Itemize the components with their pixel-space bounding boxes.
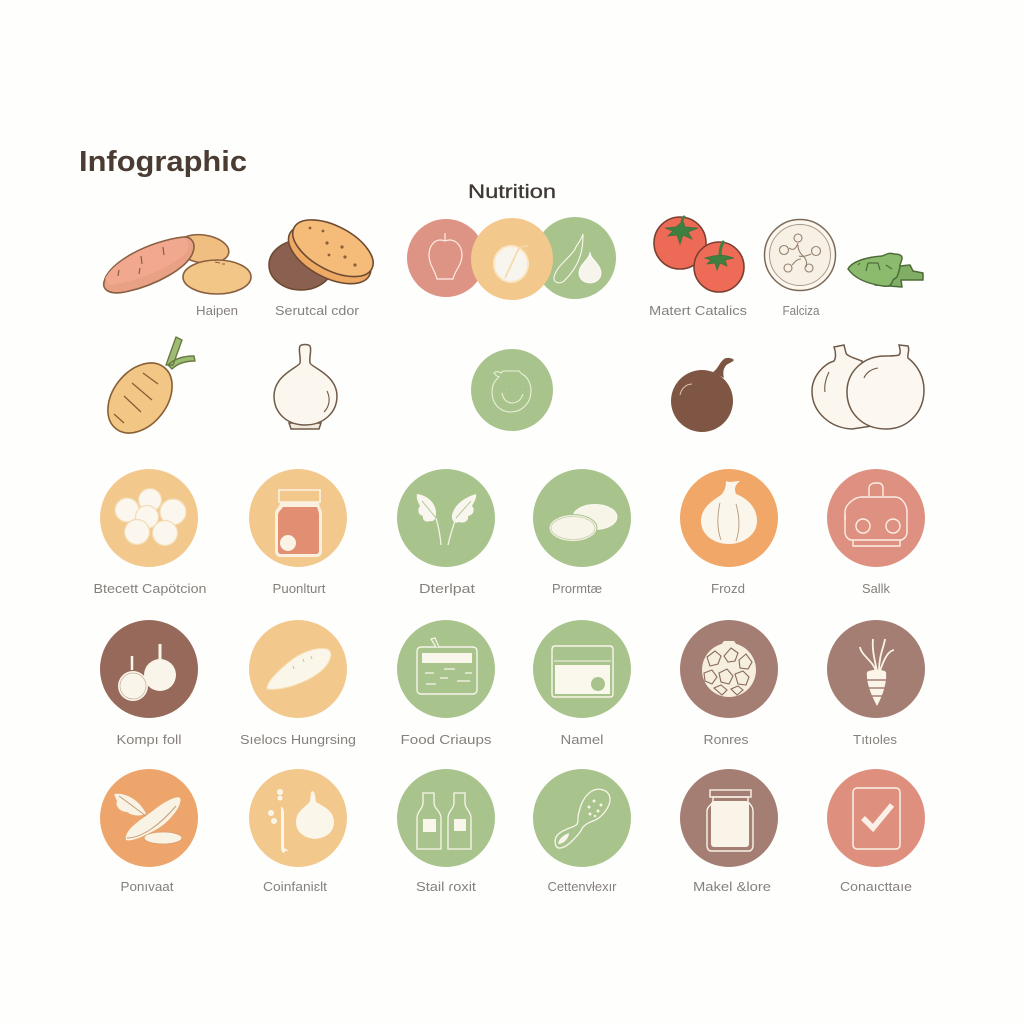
label: Ponıvaat <box>120 879 174 894</box>
label: Sıelocs Hungrsing <box>240 732 356 747</box>
circle: yellow fruit <box>471 218 553 300</box>
label: Sallk <box>862 581 890 596</box>
icon: flat breads <box>533 469 631 567</box>
icon: bottles <box>397 769 495 867</box>
icon: carrot <box>95 337 195 445</box>
icon: almonds and leaf <box>100 769 198 867</box>
label: Dterlpat <box>419 581 475 596</box>
label: Matert Catalics <box>649 303 748 318</box>
label: Ronres <box>704 732 749 747</box>
label: Haipen <box>196 303 238 318</box>
title: Infographic <box>79 146 247 178</box>
icon: leaves <box>397 469 495 567</box>
label: Makel &lore <box>693 879 771 894</box>
label: Coinfaniɛlt <box>263 879 327 894</box>
icon: white onions <box>812 345 924 429</box>
label: Food Criaups <box>400 732 492 747</box>
icon: plate with grains <box>764 220 836 290</box>
icon group: overlapping nutrition circles <box>407 217 616 300</box>
icon: food box <box>397 620 495 718</box>
label: Conaıcttaıe <box>840 879 912 894</box>
circle: rose apple <box>407 219 485 297</box>
icon: green vegetable <box>848 253 923 287</box>
icon: white garlic <box>274 344 337 429</box>
label: Falciza <box>782 303 820 318</box>
icon: tomatoes <box>654 216 744 292</box>
icon: spoon with grains <box>533 769 631 867</box>
icon: storage container <box>533 620 631 718</box>
icon: biscuit and brown bun <box>269 208 383 296</box>
icon: storage jar <box>680 769 778 867</box>
label: Frozd <box>711 581 745 596</box>
icon: cooking pot <box>827 469 925 567</box>
icon: dark fig <box>671 358 734 432</box>
icon: jam jar <box>249 469 347 567</box>
label: Kompı foll <box>116 732 182 747</box>
label: Serutcal cdor <box>275 303 360 318</box>
label: Btecett Capötcion <box>94 581 206 596</box>
label: Tıtıoles <box>853 732 898 747</box>
icon: baguette <box>249 620 347 718</box>
icon: stick and garlic <box>249 769 347 867</box>
icon: check card <box>827 769 925 867</box>
icon: green circle with pot <box>471 349 553 431</box>
circle: green eggplant and garlic <box>534 217 616 299</box>
heading: nutrition: Nutrition <box>468 182 556 203</box>
label: Cettenvłexır <box>548 879 617 894</box>
label: Namel <box>560 732 604 747</box>
icon: garlic on orange <box>680 469 778 567</box>
icon: balls on yellow <box>100 469 198 567</box>
label: Puonlturt <box>272 581 326 596</box>
label: Stail ɾoxit <box>416 879 476 894</box>
icon: radish <box>827 620 925 718</box>
icon: sliced sweet potato <box>104 232 251 294</box>
label: Prormtæ <box>552 581 602 596</box>
icon: walnut <box>680 620 778 718</box>
icon: garlic bulbs on brown <box>100 620 198 718</box>
